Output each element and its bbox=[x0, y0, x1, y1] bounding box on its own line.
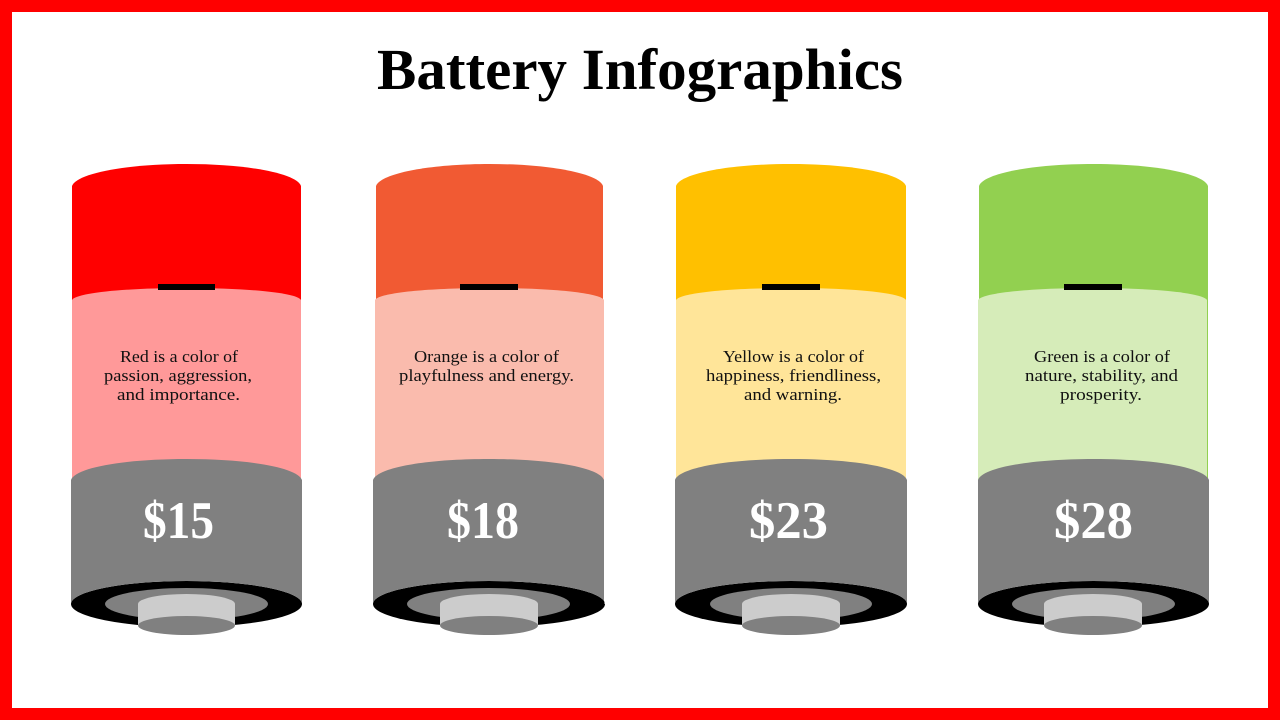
yellow description: Yellow is a color of bbox=[723, 347, 864, 366]
inner grey ring bbox=[710, 588, 872, 620]
orange text panel bbox=[375, 288, 604, 500]
red text panel bbox=[72, 288, 301, 500]
green text panel bbox=[978, 288, 1207, 500]
orange description: playfulness and energy. bbox=[399, 366, 574, 385]
terminal dash bbox=[460, 284, 518, 290]
terminal dash bbox=[158, 284, 215, 290]
grey price body bbox=[675, 459, 907, 604]
green description: prosperity. bbox=[1060, 385, 1142, 404]
orange description bbox=[399, 347, 574, 385]
yellow text panel bbox=[676, 288, 906, 500]
green top cap bbox=[979, 164, 1208, 490]
yellow description: and warning. bbox=[744, 385, 842, 404]
battery: orange bbox=[373, 164, 605, 635]
red description: Red is a color of bbox=[120, 347, 238, 366]
terminal dash bbox=[1064, 284, 1122, 290]
black base ring bbox=[71, 581, 302, 627]
yellow description bbox=[706, 347, 881, 404]
red description: and importance. bbox=[117, 385, 240, 404]
battery: red bbox=[71, 164, 302, 635]
grey price body bbox=[978, 459, 1209, 604]
negative terminal bbox=[138, 594, 235, 635]
battery: yellow bbox=[675, 164, 907, 635]
orange description: Orange is a color of bbox=[414, 347, 559, 366]
red description: passion, aggression, bbox=[104, 366, 252, 385]
green description: nature, stability, and bbox=[1025, 366, 1179, 385]
black base ring bbox=[373, 581, 605, 627]
negative terminal bbox=[440, 594, 538, 635]
green description bbox=[1025, 347, 1179, 404]
inner grey ring bbox=[407, 588, 570, 620]
price $23: $23 bbox=[749, 492, 828, 550]
price $18: $18 bbox=[447, 492, 519, 550]
orange top cap bbox=[376, 164, 603, 310]
terminal dash bbox=[762, 284, 820, 290]
black base ring bbox=[978, 581, 1209, 627]
battery: green bbox=[978, 164, 1209, 635]
grey price body bbox=[373, 459, 605, 604]
grey price body bbox=[71, 459, 302, 604]
price $15: $15 bbox=[143, 492, 214, 550]
title: Battery Infographics bbox=[377, 37, 903, 102]
yellow top cap bbox=[676, 164, 906, 310]
yellow description: happiness, friendliness, bbox=[706, 366, 881, 385]
price $28: $28 bbox=[1054, 492, 1133, 550]
green description: Green is a color of bbox=[1034, 347, 1170, 366]
black base ring bbox=[675, 581, 907, 627]
negative terminal bbox=[742, 594, 840, 635]
inner grey ring bbox=[1012, 588, 1175, 620]
negative terminal bbox=[1044, 594, 1142, 635]
inner grey ring bbox=[105, 588, 268, 620]
red description bbox=[104, 347, 252, 404]
red top cap bbox=[72, 164, 301, 310]
